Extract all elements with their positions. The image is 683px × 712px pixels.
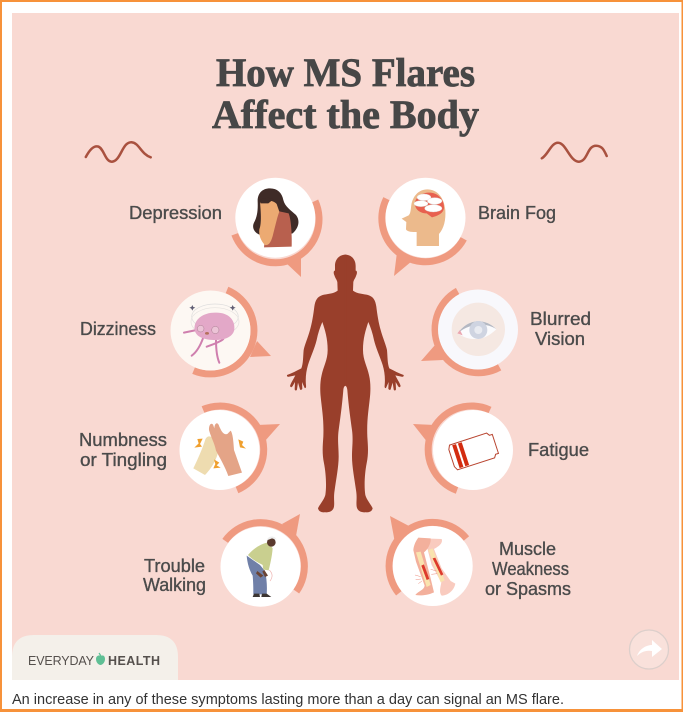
icon: blurred eye [452, 303, 505, 356]
title [212, 50, 479, 137]
label: Brain Fog: Brain Fog [478, 203, 556, 223]
logo: Everyday Health: HEALTH [108, 654, 160, 668]
icon: green apple [96, 653, 105, 665]
label: Fatigue: Fatigue [528, 440, 589, 460]
share button [630, 630, 668, 669]
label: Muscle Weakness or Spasms: Weakness [492, 559, 569, 579]
icon: share arrow [637, 640, 662, 657]
right wave decoration [542, 143, 607, 162]
title: Affect the Body [212, 92, 479, 137]
icon: head with clouded brain [402, 189, 445, 246]
icon: legs with muscle spasms [413, 538, 455, 596]
label: Blurred Vision [530, 309, 591, 349]
icon: low battery [448, 432, 499, 470]
label: Trouble Walking: Trouble [144, 556, 205, 576]
label: Muscle Weakness or Spasms: Muscle [499, 539, 556, 559]
label: Muscle Weakness or Spasms: or Spasms [485, 579, 571, 599]
label: Numbness or Tingling [79, 430, 167, 470]
icon: tingling hands [193, 423, 246, 476]
panel: muscle weakness or spasms [389, 516, 571, 606]
logo: Everyday Health: EVERYDAY [28, 654, 95, 668]
panel: blurred vision [421, 290, 591, 373]
label: Blurred Vision: Vision [535, 329, 585, 349]
logo: Everyday Health [12, 635, 178, 680]
icon: dizzy brain character [184, 304, 239, 363]
panel: depression [129, 178, 319, 277]
label: Trouble Walking: Walking [143, 575, 206, 595]
label: Numbness or Tingling: or Tingling [80, 450, 167, 470]
label: Muscle Weakness or Spasms [485, 539, 571, 599]
icon: woman holding her face [253, 188, 298, 247]
title: How MS Flares [216, 50, 475, 95]
label: Blurred Vision: Blurred [530, 309, 591, 329]
label: Depression: Depression [129, 203, 222, 223]
human body silhouette [287, 255, 404, 512]
label: Trouble Walking [143, 556, 206, 595]
panel: fatigue [413, 406, 589, 490]
caption: An increase in any of these symptoms lasting more than a day can signal an MS flare. [12, 691, 564, 708]
label: Numbness or Tingling: Numbness [79, 430, 167, 450]
panel: dizziness [80, 290, 271, 374]
left wave decoration [86, 142, 151, 162]
panel: brain fog [382, 178, 556, 276]
icon: bent-over man [247, 536, 277, 597]
label: Dizziness: Dizziness [80, 319, 156, 339]
panel: trouble walking [143, 514, 304, 607]
panel: numbness or tingling [79, 406, 280, 490]
